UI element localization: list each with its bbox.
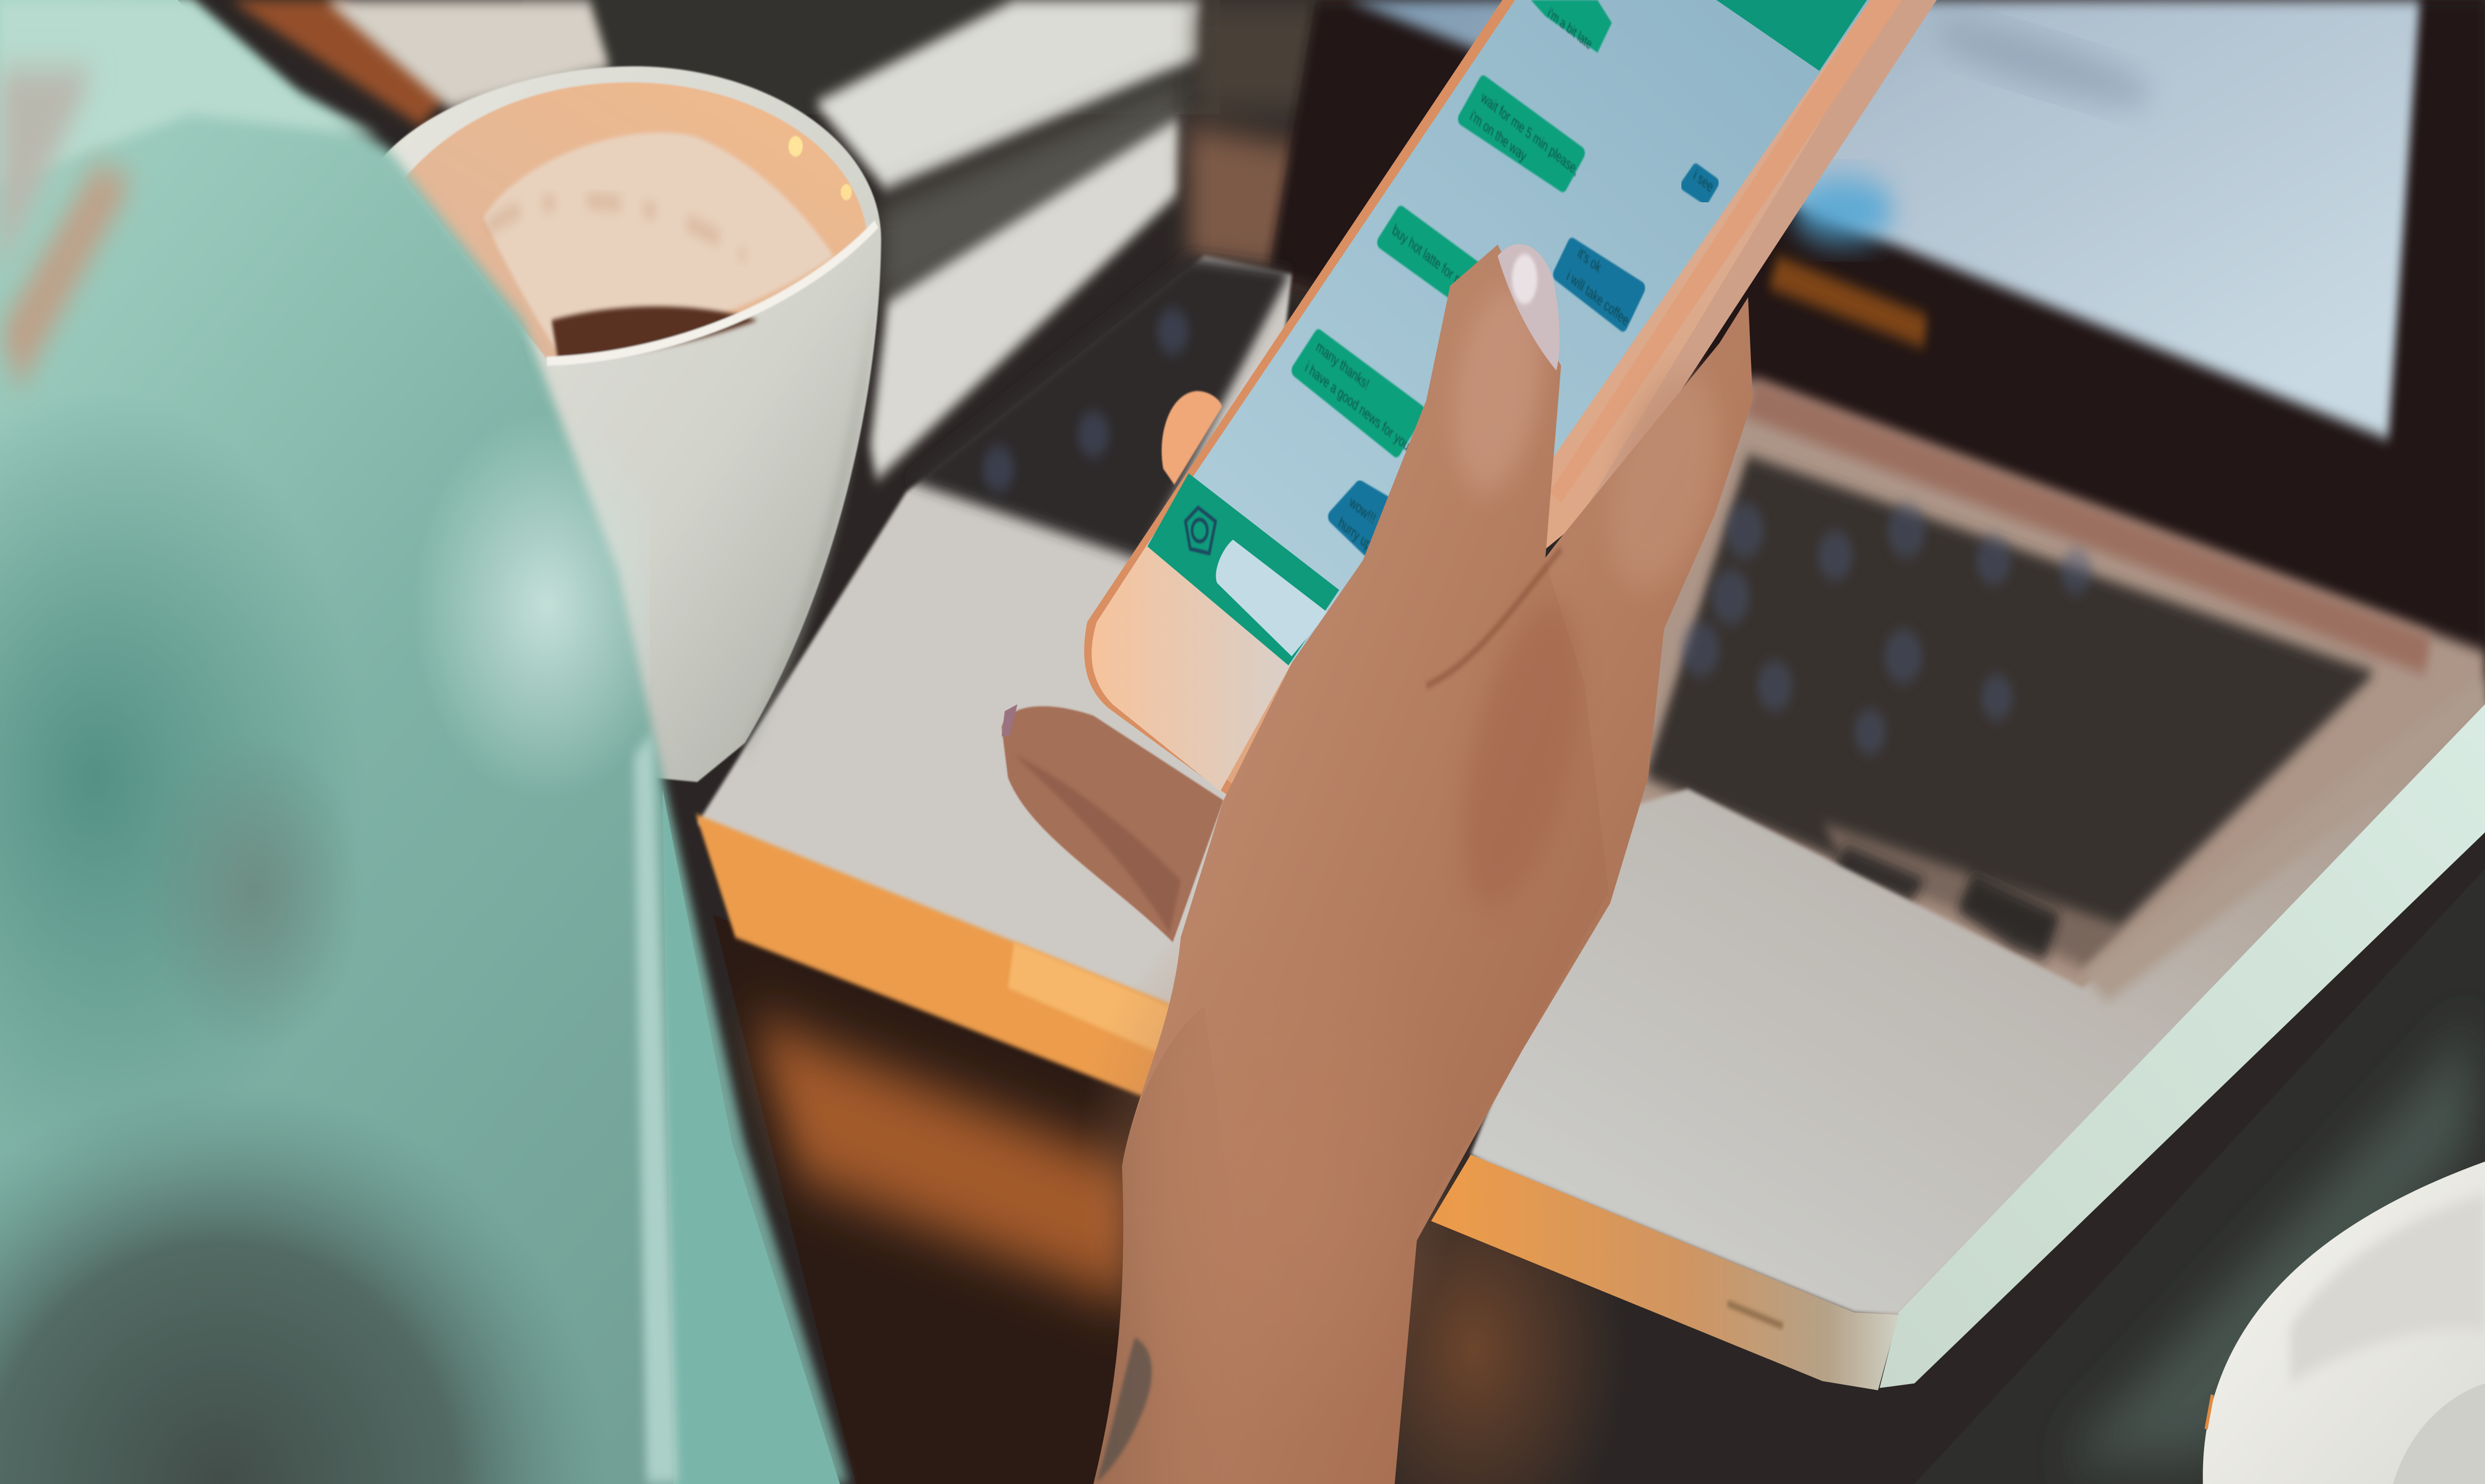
phone screen: [1148, 0, 1870, 663]
chat footer bar: [1148, 473, 1339, 665]
message bubble: wait for me: i'm on the way: [1468, 106, 1529, 165]
message bubble: i see: i see: [1691, 165, 1716, 196]
back of hand and wrist: [1093, 245, 1609, 1484]
coffee surface: [552, 307, 757, 359]
message bubble: it's ok: it's ok: [1575, 244, 1604, 277]
camera icon: [1185, 507, 1216, 553]
message bubble: i'm a bit late: i'm a bit late: [1546, 5, 1594, 53]
laptop screen and bezel: [1268, 0, 2485, 686]
message bubble: i'm a bit late: [1531, 0, 1612, 53]
fingertip behind phone: [1161, 391, 1222, 485]
orange laptop logo glow: [1769, 256, 1927, 347]
message bubble: it's ok: i will take coffee: [1565, 266, 1631, 330]
person shoulder in teal shirt: [0, 0, 849, 1484]
little finger: [1001, 706, 1224, 942]
message bubble: wow hurry up: wow!!!: [1347, 493, 1378, 528]
chat header bar: [1716, 0, 1867, 71]
saucer: [2203, 1161, 2485, 1484]
laptop deck: [697, 256, 2485, 1326]
message bubble: many thanks: many thanks!: [1314, 337, 1372, 393]
laptop keyboard: [983, 309, 2376, 972]
message input field: [1216, 540, 1328, 656]
coffee cup: [380, 66, 881, 782]
laptop palm rest and edges: [696, 677, 2485, 1390]
tattoo on wrist: [1097, 1338, 1152, 1482]
fingernail: [1497, 244, 1560, 370]
message bubble: buy hot latte: buy hot latte for me: [1390, 221, 1470, 294]
message bubble: wow hurry up: [1333, 487, 1395, 554]
smartphone: [1084, 0, 1937, 800]
hand holding phone: [1077, 244, 1753, 1484]
palm behind phone: [1204, 297, 1753, 1281]
lower fingers behind phone: [1001, 391, 1224, 942]
message bubble: wow hurry up: hurry up: [1336, 513, 1374, 554]
background books: [230, 0, 1379, 480]
phone chin: [1091, 544, 1292, 791]
message bubble: many thanks: i have a good news for you): [1303, 358, 1415, 457]
message bubble: wait for me: wait for me 5 min please,: [1479, 88, 1581, 179]
message bubble: it's ok: [1558, 244, 1640, 330]
